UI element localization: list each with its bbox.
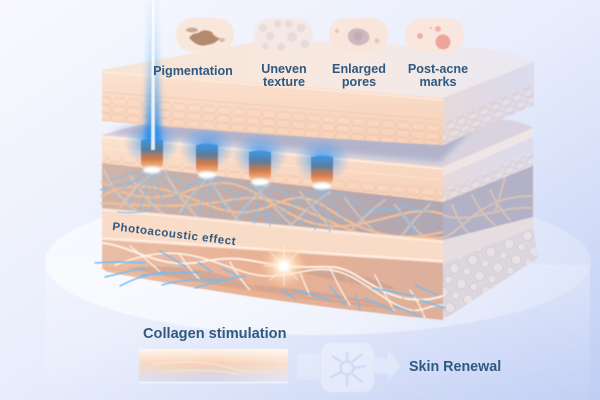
capsule 4 [294, 138, 350, 190]
lower fibre band [102, 240, 443, 320]
arrow to skin renewal [374, 350, 401, 380]
label: uneven texture: Uneven [261, 62, 307, 76]
epidermis front [102, 135, 443, 205]
icon: enlarged pores [329, 18, 388, 52]
upper skin slab [102, 40, 534, 145]
skin renewal label: Skin Renewal [409, 359, 501, 375]
icon: pigmentation [176, 18, 234, 52]
blue shock rays [100, 168, 430, 235]
icon: post-acne marks [405, 18, 464, 52]
laser pulses in dermis [100, 121, 430, 235]
lower skin block [102, 116, 538, 320]
label: post-acne marks: Post-acne [408, 62, 468, 76]
capsule 1 [124, 121, 180, 174]
dermis dark band [102, 163, 443, 240]
label: pigmentation: Pigmentation [153, 64, 233, 78]
collagen flare and blue fibres [95, 242, 445, 316]
top surface with shadow [102, 116, 533, 167]
pedestal disc [45, 189, 591, 400]
right side faces [443, 128, 533, 202]
capsule 2 [179, 126, 235, 178]
collagen stimulation heading: Collagen stimulation [143, 326, 287, 342]
label: enlarged pores: pores [342, 75, 376, 89]
label: uneven texture: texture [263, 75, 305, 89]
collagen fibres upper [102, 170, 443, 238]
arrow stub [297, 353, 320, 380]
label: post-acne marks: marks [419, 75, 457, 89]
icon: uneven texture [254, 18, 313, 52]
icon: renewal cell [321, 343, 374, 392]
capsule 3 [232, 133, 288, 186]
condition labels [153, 62, 468, 89]
mid light band [102, 208, 443, 263]
label: enlarged pores: Enlarged [332, 62, 386, 76]
laser beam [145, 0, 161, 150]
collagen strip [139, 349, 288, 382]
photoacoustic effect label: Photoacoustic effect [112, 221, 236, 248]
